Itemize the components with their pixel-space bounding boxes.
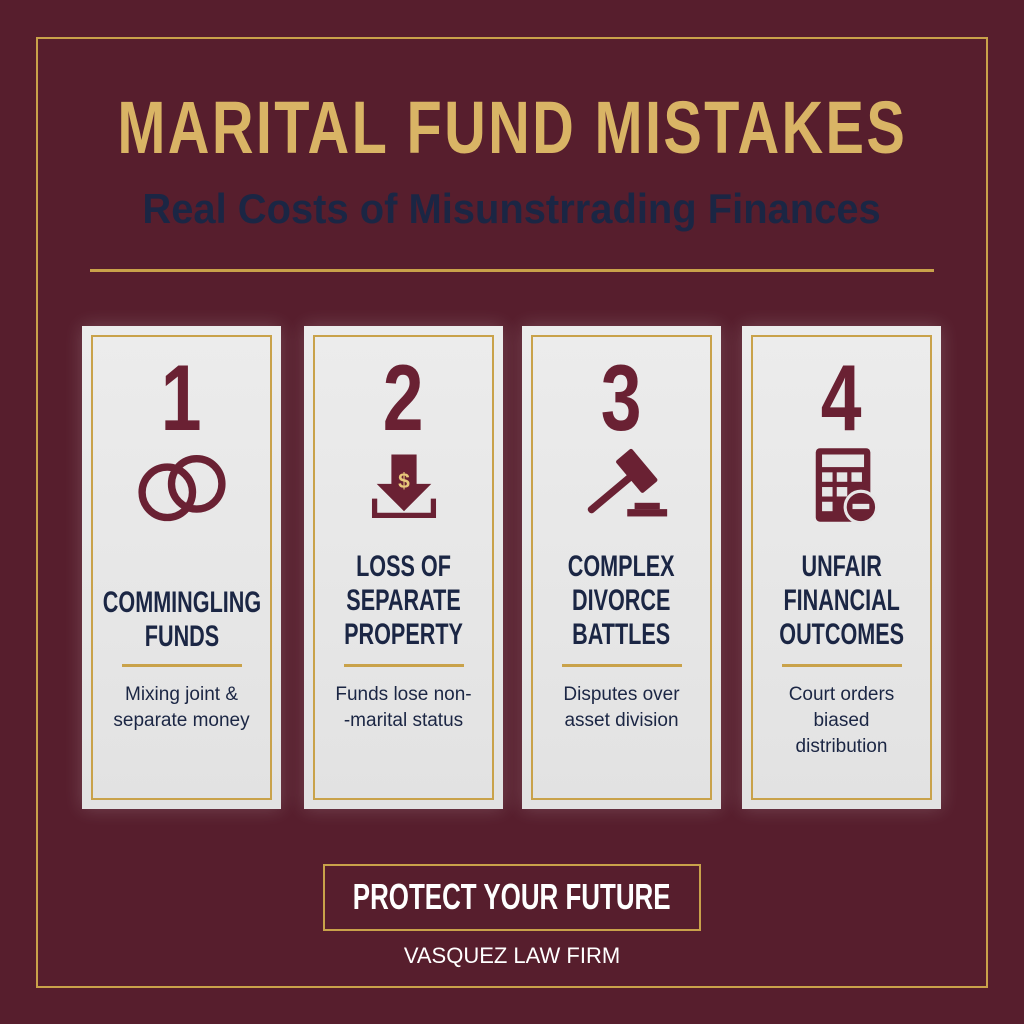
description: Mixing joint & — [125, 684, 238, 705]
description: Court orders — [789, 684, 894, 705]
title: MARITAL FUND MISTAKES — [117, 86, 907, 169]
heading: DIVORCE — [572, 584, 671, 617]
heading: BATTLES — [572, 618, 670, 651]
heading: OUTCOMES — [779, 618, 904, 651]
heading: FINANCIAL — [783, 584, 900, 617]
heading: UNFAIR — [801, 550, 882, 583]
heading — [568, 550, 675, 651]
heading: SEPARATE — [346, 584, 461, 617]
description: biased — [813, 710, 869, 731]
heading — [779, 550, 904, 651]
number 3: 3 — [601, 345, 642, 450]
button: protect your future: PROTECT YOUR FUTURE — [353, 876, 671, 917]
description — [113, 684, 250, 731]
icon: download dollar: $ — [398, 470, 410, 493]
description: asset division — [564, 710, 679, 731]
heading: COMPLEX — [568, 550, 675, 583]
panel: card 1 — [82, 326, 281, 809]
icon: gavel — [588, 448, 668, 516]
icon: calculator — [816, 448, 876, 522]
footer: firm name: VASQUEZ LAW FIRM — [404, 943, 620, 968]
icon: download dollar — [372, 454, 436, 518]
heading — [102, 586, 261, 653]
heading: PROPERTY — [344, 618, 463, 651]
number 4: 4 — [821, 345, 862, 450]
description: distribution — [796, 736, 887, 757]
description: -marital status — [344, 710, 463, 731]
description: Funds lose non- — [335, 684, 472, 705]
panel: card 2 — [304, 326, 503, 809]
panel: card 4 — [742, 326, 941, 809]
description — [563, 684, 680, 731]
number 1: 1 — [161, 345, 202, 450]
heading: COMMINGLING — [102, 586, 261, 619]
number 2: 2 — [383, 345, 424, 450]
description: Disputes over — [563, 684, 680, 705]
icon: rings — [138, 455, 226, 522]
heading: LOSS OF — [356, 550, 451, 583]
subtitle: Real Costs of Misunstrrading Finances — [143, 185, 881, 232]
gold divider — [90, 269, 934, 272]
heading: FUNDS — [144, 620, 219, 653]
panel: card 3 — [522, 326, 721, 809]
description: separate money — [113, 710, 250, 731]
heading — [344, 550, 463, 651]
button: protect your future — [323, 864, 701, 931]
description — [789, 684, 894, 757]
description — [335, 684, 472, 731]
